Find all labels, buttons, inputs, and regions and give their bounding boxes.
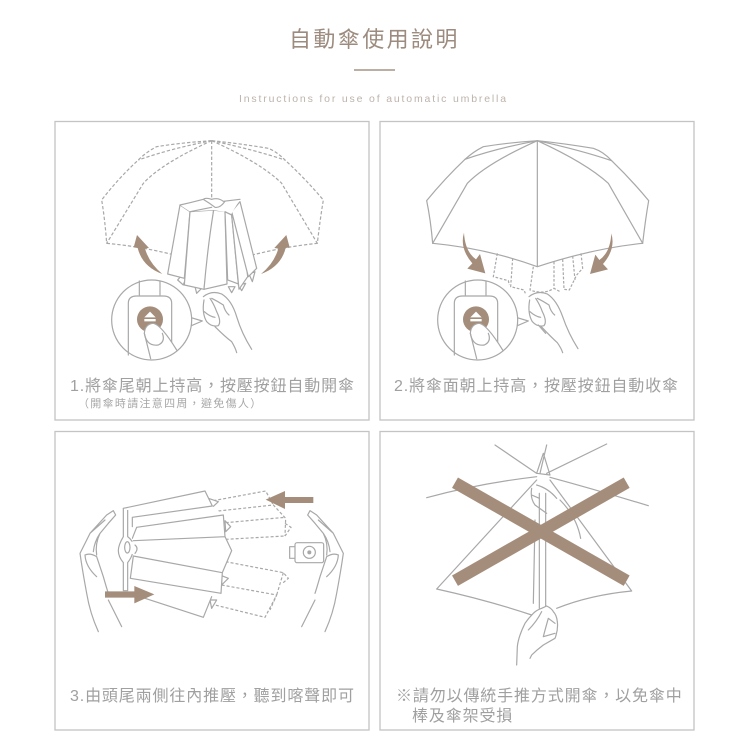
open umbrella bbox=[427, 141, 649, 267]
left hand bbox=[80, 511, 122, 632]
dashed closed umbrella bbox=[493, 253, 583, 293]
hand bbox=[529, 292, 578, 353]
title: 自動傘使用說明 bbox=[289, 27, 460, 52]
handle bbox=[290, 543, 324, 563]
hand bbox=[203, 292, 252, 353]
step 1 note: （開傘時請注意四周，避免傷人） bbox=[78, 396, 262, 410]
panel: step 1 bbox=[55, 122, 369, 420]
inverted umbrella bbox=[427, 444, 648, 615]
top hand bbox=[531, 485, 557, 513]
inset: button close-up bbox=[112, 280, 202, 360]
arrow: right up bbox=[261, 235, 290, 274]
closed umbrella bbox=[168, 198, 257, 293]
lower hand bbox=[517, 606, 558, 665]
arrow: right down bbox=[590, 233, 613, 274]
dashed open umbrella bbox=[102, 141, 323, 267]
panel: warning bbox=[380, 432, 694, 730]
dashed extended umbrella bbox=[211, 491, 291, 617]
arrow: left down bbox=[463, 233, 485, 273]
arrow: left up bbox=[134, 235, 162, 274]
cross mark bbox=[455, 483, 627, 581]
step 2 text: 2.將傘面朝上持高，按壓按鈕自動收傘 bbox=[394, 376, 679, 395]
warning text line 2: 棒及傘架受損 bbox=[412, 707, 513, 725]
panel: step 3 bbox=[55, 432, 369, 730]
right hand bbox=[302, 511, 343, 632]
compressed umbrella bbox=[118, 491, 232, 617]
inset: button close-up bbox=[438, 280, 528, 360]
subtitle: Instructions for use of automatic umbrella bbox=[239, 93, 508, 105]
step 1 text: 1.將傘尾朝上持高，按壓按鈕自動開傘 bbox=[70, 376, 355, 395]
step 3 text: 3.由頭尾兩側往內推壓，聽到喀聲即可 bbox=[70, 687, 355, 705]
arrow: push left bbox=[266, 491, 313, 509]
arrow: push right bbox=[105, 586, 154, 603]
panel: step 2 bbox=[380, 122, 694, 420]
warning text: ※請勿以傳統手推方式開傘，以免傘中 bbox=[396, 687, 683, 705]
